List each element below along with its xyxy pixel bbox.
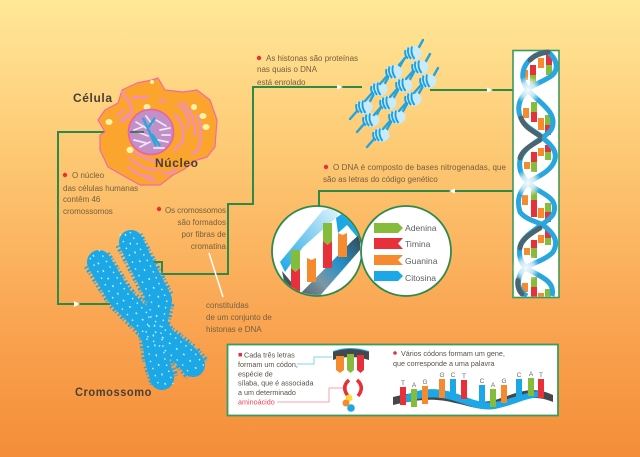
gene letters: T (401, 380, 405, 387)
gene letters: A (412, 382, 417, 389)
bases legend circle (361, 206, 451, 296)
connector: chromosome to histones (153, 87, 362, 274)
legend: Citosina (374, 271, 403, 281)
connector: histones to helix (430, 89, 513, 91)
gene letters: G (422, 379, 428, 386)
gene bases (400, 378, 544, 407)
legend: Guanina (374, 255, 403, 265)
text: chromatin note: constituídas (206, 301, 249, 310)
text: chromosome note: Os cromossomos (165, 206, 226, 215)
text: chromosome note: cromatina (191, 242, 227, 251)
lower strand end (282, 271, 292, 287)
chromosome illustration (90, 232, 204, 386)
nucleus pointer (130, 131, 144, 133)
gene letters: C (517, 372, 522, 379)
text: chromosome note: por fibras de (182, 230, 227, 239)
helix frame (513, 50, 559, 298)
gene letters: A (529, 371, 534, 378)
label: Cromossomo: Cromossomo (75, 385, 152, 399)
gene letters (401, 371, 543, 389)
gene strand (393, 389, 553, 409)
gene letters: G (501, 378, 507, 385)
label: Núcleo: Núcleo (155, 156, 199, 170)
text: codon note: formam um códon, (238, 360, 298, 369)
gene letters: T (462, 373, 466, 380)
label: Célula: Célula (73, 91, 113, 105)
organelles (118, 92, 201, 181)
magnified bases (291, 250, 300, 272)
cell illustration (98, 78, 217, 185)
gene letters: C (480, 378, 485, 385)
base pairs (522, 53, 552, 296)
text: gene note: que corresponde a uma palavra (393, 359, 494, 368)
DNA helix panel (512, 50, 559, 298)
text: codon note: espécie de (238, 370, 273, 378)
text: chromosome note: são formados (178, 218, 226, 227)
text: codon note: aminoácido (238, 398, 275, 406)
text: gene note: Vários códons formam um gene, (401, 349, 505, 358)
histones illustration (350, 40, 438, 147)
text: nucleus note: das células humanas (63, 184, 138, 193)
text: histones note (257, 54, 358, 87)
text: chromosome note (157, 206, 227, 251)
text: nucleus note: cromossomos (63, 207, 113, 216)
bases legend circle: Adenina (405, 223, 437, 233)
nucleus chromatin (134, 116, 170, 148)
bases legend circle: Citosina (405, 273, 436, 283)
text: gene note (393, 349, 505, 368)
lower strand (300, 234, 360, 298)
text: chromatin note: de um conjunto de (206, 313, 272, 322)
chromosome speckles (90, 232, 204, 386)
magnified DNA circle (272, 206, 362, 298)
text: histones note: nas quais o DNA (257, 65, 318, 74)
legend: Timina (374, 238, 403, 249)
legend: Adenina (374, 223, 403, 233)
helix highlights (512, 76, 542, 282)
gene letters: G (439, 372, 445, 379)
connector: codon (297, 357, 332, 364)
bases legend circle: Timina (405, 239, 431, 249)
connector: amino acid (277, 388, 347, 402)
text: DNA note (323, 163, 507, 184)
gene letters: T (539, 372, 543, 379)
cell body (98, 78, 217, 185)
arrow: nucleus to chromosome (74, 301, 80, 307)
chromosome centromere (139, 316, 171, 348)
vesicles (106, 80, 210, 153)
connector: helix to bases (319, 191, 513, 206)
helix strands (518, 52, 556, 296)
panel: codons and genes (228, 344, 558, 416)
text: nucleus note: contêm 46 (63, 195, 101, 204)
helix dark segments (518, 52, 548, 294)
text: histones note: está enrolado (257, 78, 306, 87)
arrow: histones to helix (487, 88, 493, 92)
text: DNA note: são as letras do código genético (323, 175, 438, 184)
arrow: chromatin pointer (209, 253, 223, 297)
text: codon note: a um determinado (238, 388, 296, 397)
text: codon note: Cada três letras (244, 350, 295, 360)
connector: nucleus to chromosome (58, 132, 143, 304)
text: nucleus note (63, 171, 138, 216)
text: chromatin note: histonas e DNA (206, 325, 262, 334)
bases legend circle: Guanina (405, 256, 438, 266)
gene letters: C (451, 372, 456, 379)
gene letters: A (491, 382, 496, 389)
text: histones note: As histonas são proteínas (266, 54, 358, 63)
text: codon note: sílaba, que é associada (238, 378, 314, 388)
arrow: helix to bases (449, 188, 455, 194)
upper strand corner (336, 214, 358, 237)
icon: amino acid (342, 380, 361, 412)
text: chromatin note (206, 301, 272, 334)
chromosome body (99, 242, 193, 378)
icon: codon (333, 348, 369, 373)
text: DNA note: O DNA é composto de bases nitrogenadas, que (333, 163, 507, 172)
text: nucleus note: O núcleo (72, 171, 105, 180)
arrow: chromosome to histones (337, 84, 343, 90)
text: codon note (238, 350, 314, 406)
nucleus chromosome (143, 118, 160, 146)
nucleus (128, 110, 174, 154)
upper strand (280, 206, 340, 272)
chromosome spikes (97, 240, 197, 380)
panel frame (228, 344, 558, 416)
